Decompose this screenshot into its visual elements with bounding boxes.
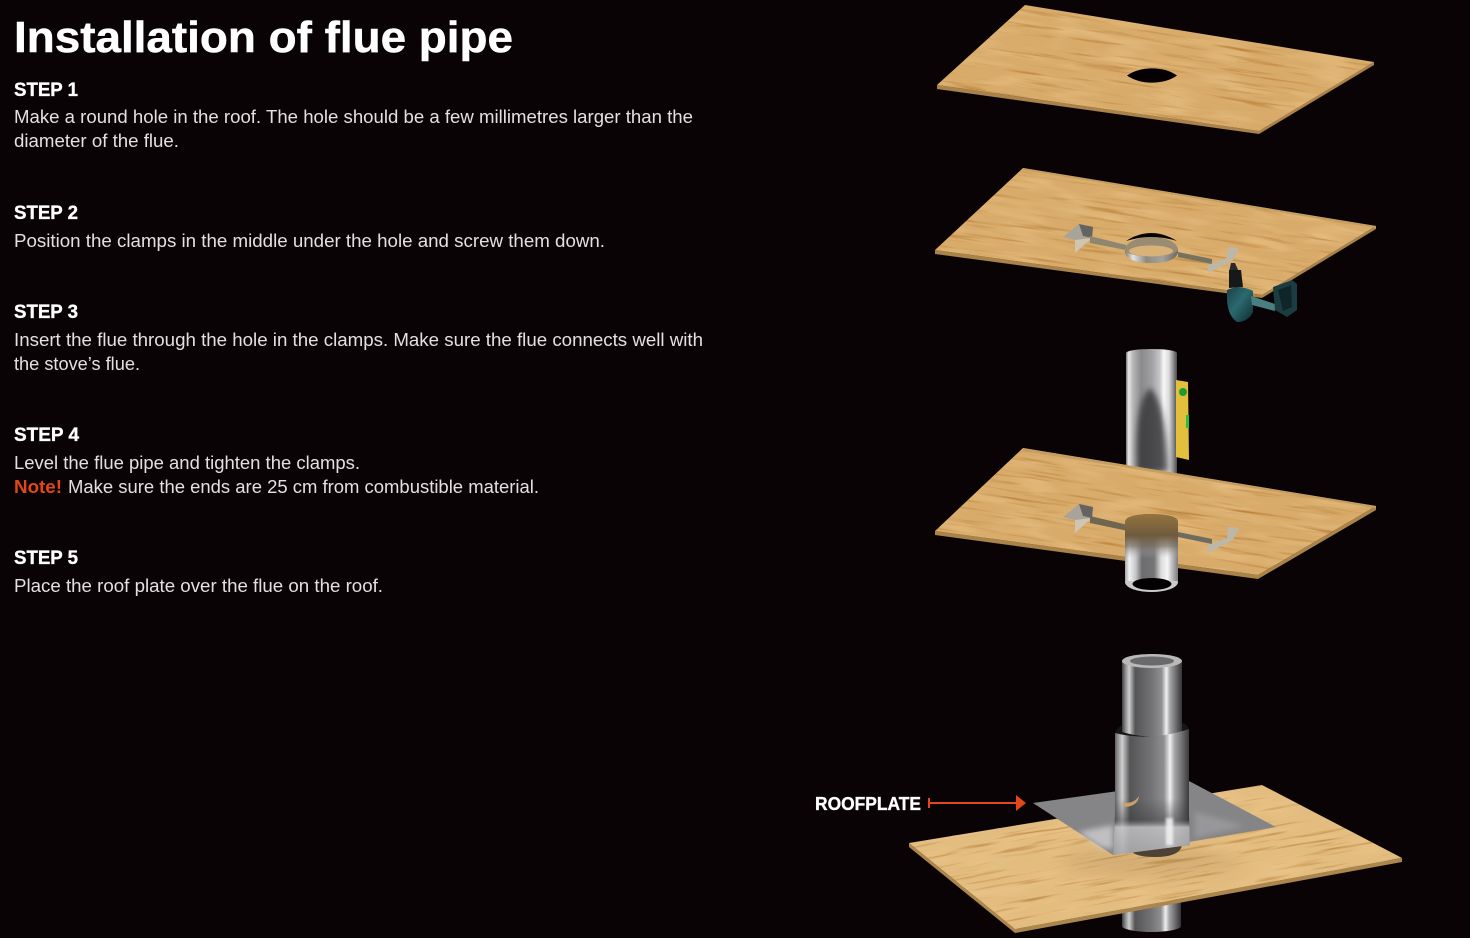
text block: step 4: Make sure the ends are 25 cm from combustible material.: [68, 477, 539, 497]
icon: plate shadow on board: [1060, 847, 1240, 877]
text block: step 3: STEP 3: [14, 302, 78, 323]
text block: step 3: [14, 302, 703, 374]
text block: step 4: [14, 425, 539, 497]
title: Installation of flue pipe: [14, 13, 513, 62]
icon: roof plate: [1033, 781, 1276, 855]
text block: step 1: STEP 1: [14, 80, 78, 101]
illustration: board with flue through clamps: [935, 448, 1376, 592]
text block: step 1: [14, 80, 693, 151]
icon: drill: [1227, 263, 1297, 322]
icon: lower flue pipe: [1125, 514, 1178, 592]
text block: step 5: [14, 548, 383, 596]
text block: step 5: STEP 5: [14, 548, 78, 569]
icon: clamp ring: [1125, 233, 1178, 263]
callout: roofplate label: ROOFPLATE: [815, 794, 921, 814]
text block: step 2: [14, 203, 605, 251]
icon: spirit level: [1176, 380, 1189, 460]
text block: step 2: STEP 2: [14, 203, 78, 224]
illustration: board with round hole: [937, 5, 1374, 134]
text block: step 4: STEP 4: [14, 425, 79, 446]
illustration: board with clamps and drill: [935, 168, 1376, 322]
icon: flue below the board: [1122, 900, 1181, 932]
text block: step 1: Make a round hole in the roof. The hole should be a few millimetres larger than the: [14, 107, 693, 127]
arrow: roofplate: [928, 795, 1026, 811]
illustration: chimney sleeve and pipe: [1113, 654, 1190, 855]
icon: hole: [1127, 68, 1177, 83]
text block: step 5: Place the roof plate over the flue on the roof.: [14, 576, 383, 596]
icon: collar under plate: [1130, 845, 1182, 857]
callout: roofplate label: [815, 794, 1026, 814]
illustration: upper flue pipe with spirit level: [1126, 349, 1189, 475]
icon: clamp brackets: [1063, 224, 1239, 273]
text block: step 3: Insert the flue through the hole in the clamps. Make sure the flue connects well with: [14, 330, 703, 350]
text block: step 3: the stove’s flue.: [14, 354, 140, 374]
text block: step 1: diameter of the flue.: [14, 131, 179, 151]
icon: clamp brackets: [1063, 504, 1239, 553]
text block: step 4: Level the flue pipe and tighten the clamps.: [14, 453, 360, 473]
illustration: board with roof plate: [909, 781, 1402, 933]
text block: step 2: Position the clamps in the middle under the hole and screw them down.: [14, 231, 605, 251]
text block: step 4: Note!: [14, 477, 62, 497]
